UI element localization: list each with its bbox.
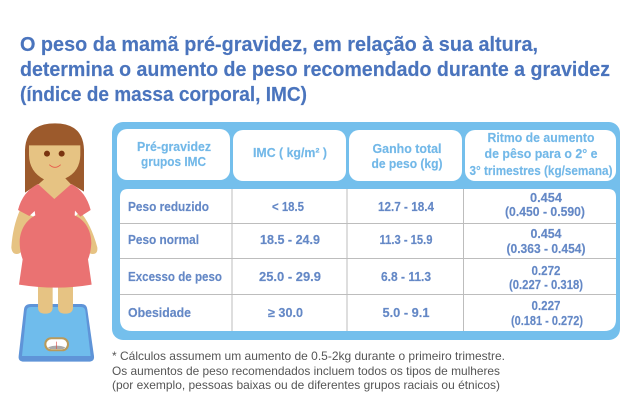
row: peso reduzido: < 18.5 xyxy=(272,200,304,214)
title: determina o aumento de peso recomendado durante a gravidez xyxy=(20,59,610,81)
row: obesidade: 0.227 xyxy=(532,299,561,313)
title: O peso da mamã pré-gravidez, em relação à sua altura, xyxy=(20,34,538,56)
icon: smile xyxy=(49,165,61,167)
footnote: * Cálculos assumem um aumento de 0.5-2kg durante o primeiro trimestre. xyxy=(112,349,505,363)
icon: legs xyxy=(38,283,73,314)
icon: arms xyxy=(11,210,97,254)
title xyxy=(20,34,610,106)
panel: table background xyxy=(112,122,620,340)
row: peso reduzido: 12.7 - 18.4 xyxy=(378,200,434,214)
row: peso normal: 18.5 - 24.9 xyxy=(260,233,320,247)
row: peso normal: 0.454 xyxy=(530,227,562,241)
header cell: ganho total xyxy=(349,130,462,181)
row: excesso de peso xyxy=(128,264,583,292)
row: peso normal: Peso normal xyxy=(128,233,199,247)
icon: scale xyxy=(19,304,94,362)
title: (índice de massa corporal, IMC) xyxy=(20,84,307,106)
header cell: IMC: IMC ( kg/m² ) xyxy=(253,146,327,160)
header cell: grupos IMC: grupos IMC xyxy=(141,155,206,169)
row: excesso de peso: 25.0 - 29.9 xyxy=(259,270,321,284)
header cell: ritmo de aumento: 3° trimestres (kg/semana) xyxy=(470,164,612,178)
row: peso reduzido: (0.450 - 0.590) xyxy=(505,205,585,219)
footnote: Os aumentos de peso recomendados incluem todos os tipos de mulheres xyxy=(112,364,500,378)
icon: hair back xyxy=(25,123,84,193)
table header xyxy=(117,129,616,181)
row: obesidade: (0.181 - 0.272) xyxy=(511,314,583,328)
header cell: ganho total: de peso (kg) xyxy=(372,157,442,171)
table body xyxy=(120,189,616,331)
row: obesidade: ≥ 30.0 xyxy=(268,306,303,320)
footnote: (por exemplo, pessoas baixas ou de diferentes grupos raciais ou étnicos) xyxy=(112,378,500,392)
header cell: ritmo de aumento xyxy=(465,130,616,181)
row: peso normal xyxy=(128,227,586,256)
illustration: pregnant woman on scale xyxy=(11,123,97,362)
icon: dress xyxy=(18,184,92,288)
header cell: ganho total: Ganho total xyxy=(372,142,442,156)
row: excesso de peso: Excesso de peso xyxy=(128,270,222,284)
row: peso reduzido: 0.454 xyxy=(530,191,562,205)
footnote xyxy=(112,349,505,392)
row: obesidade xyxy=(128,299,583,328)
row: peso reduzido xyxy=(128,191,585,219)
header cell: grupos IMC: Pré-gravidez xyxy=(137,140,211,154)
row: excesso de peso: (0.227 - 0.318) xyxy=(509,278,583,292)
header cell: grupos IMC xyxy=(117,129,230,180)
row: obesidade: 5.0 - 9.1 xyxy=(382,306,430,320)
row: peso reduzido: Peso reduzido xyxy=(128,200,209,214)
row: excesso de peso: 6.8 - 11.3 xyxy=(381,270,431,284)
row: excesso de peso: 0.272 xyxy=(532,264,561,278)
row: obesidade: Obesidade xyxy=(128,306,191,320)
header cell: ritmo de aumento: de pêso para o 2° e xyxy=(484,147,598,161)
row: peso normal: (0.363 - 0.454) xyxy=(506,242,586,256)
icon: neck and face xyxy=(29,145,80,200)
row: peso normal: 11.3 - 15.9 xyxy=(380,233,433,247)
header cell: ritmo de aumento: Ritmo de aumento xyxy=(488,131,595,145)
icon: eyes xyxy=(44,151,65,157)
header cell: IMC xyxy=(233,130,346,181)
